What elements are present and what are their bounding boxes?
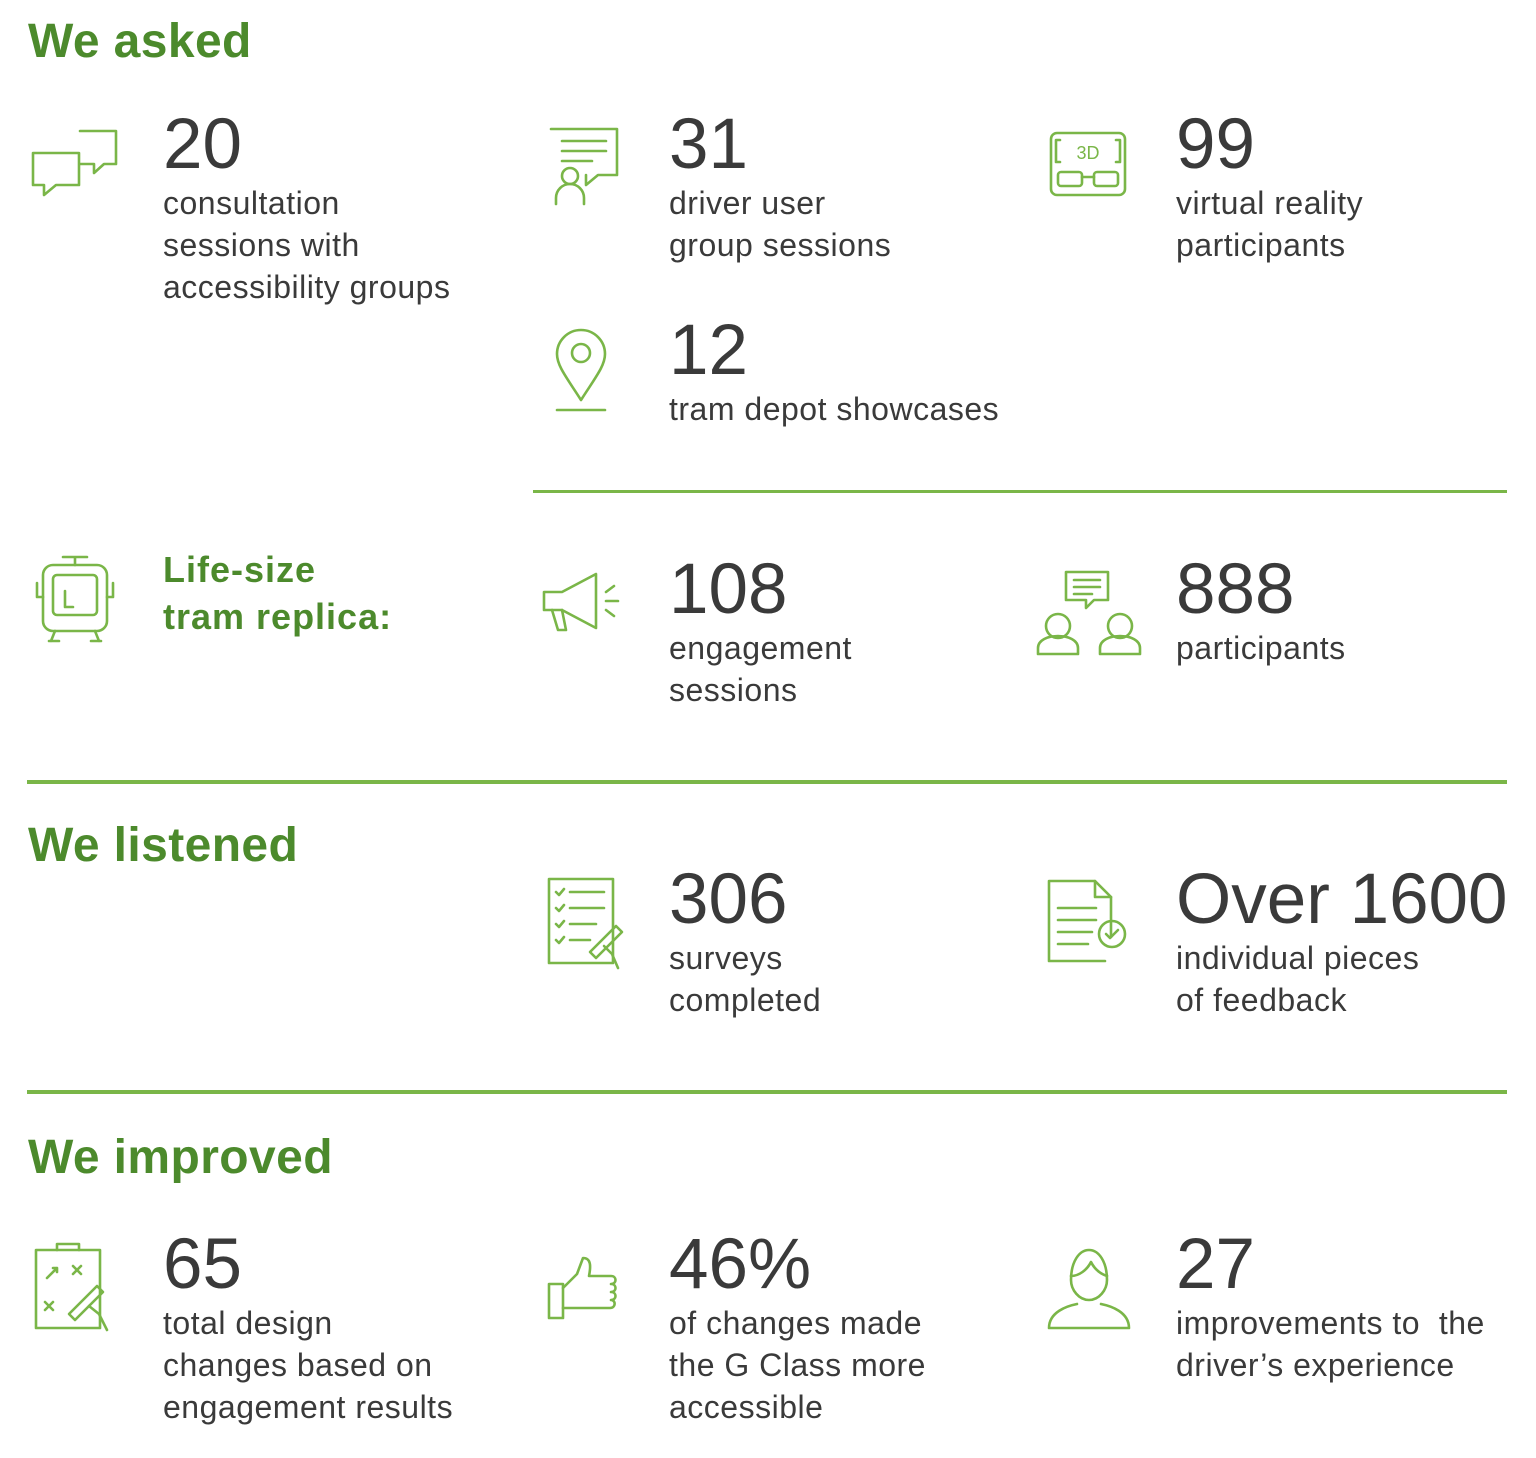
- stat: 46% more accessible: of changes made: [669, 1305, 922, 1341]
- heading: We improved: We improved: [28, 1131, 333, 1184]
- stat: 65 design changes: changes based on: [163, 1347, 433, 1383]
- heading: We asked: We asked: [28, 15, 252, 68]
- stat: 20 consultation sessions: [163, 105, 450, 305]
- icon: driver person: [1048, 1248, 1130, 1330]
- stat: 12 tram depot showcases: 12: [669, 311, 748, 390]
- text: Life-size tram replica: tram replica:: [163, 596, 392, 637]
- stat: 27 driver improvements: 27: [1176, 1225, 1255, 1304]
- stat: 20 consultation sessions: consultation: [163, 185, 340, 221]
- stat: Over 1600 feedback: [1176, 860, 1508, 1018]
- stat: 888 participants: [1176, 550, 1346, 666]
- stat: 27 driver improvements: [1176, 1225, 1485, 1383]
- stat: 108 engagement sessions: [669, 550, 852, 708]
- stat: 20 consultation sessions: accessibility groups: [163, 269, 450, 305]
- stat: 306 surveys completed: surveys: [669, 940, 783, 976]
- icon: 3D glasses: 3D: [1076, 143, 1100, 163]
- icon: checklist survey: [548, 878, 624, 970]
- icon: tram: [36, 556, 114, 642]
- stat: 306 surveys completed: completed: [669, 982, 821, 1018]
- icon: presenter: [550, 128, 618, 206]
- stat: 306 surveys completed: 306: [669, 860, 787, 939]
- icon: megaphone: [542, 572, 620, 632]
- text: Life-size tram replica: [163, 549, 392, 637]
- stat: 20 consultation sessions: 20: [163, 105, 242, 184]
- stat: Over 1600 feedback: of feedback: [1176, 982, 1347, 1018]
- stat: 306 surveys completed: [669, 860, 821, 1018]
- stat: 888 participants: 888: [1176, 550, 1294, 629]
- stat: 12 tram depot showcases: tram depot showcases: [669, 391, 999, 427]
- stat: 99 virtual reality participants: participants: [1176, 227, 1346, 263]
- stat: 46% more accessible: 46%: [669, 1225, 811, 1304]
- icon: two people with speech: [1036, 570, 1142, 656]
- stat: 27 driver improvements: driver’s experience: [1176, 1347, 1455, 1383]
- stat: Over 1600 feedback: individual pieces: [1176, 940, 1419, 976]
- stat: 888 participants: participants: [1176, 630, 1346, 666]
- icon: 3D glasses: [1050, 132, 1126, 196]
- text: Life-size tram replica: Life-size: [163, 549, 316, 590]
- stat: 108 engagement sessions: engagement: [669, 630, 852, 666]
- stat: 12 tram depot showcases: [669, 311, 999, 427]
- stat: 31 driver user group sessions: [669, 105, 891, 263]
- stat: Over 1600 feedback: Over 1600: [1176, 860, 1508, 939]
- stat: 99 virtual reality participants: virtual reality: [1176, 185, 1363, 221]
- stat: 46% more accessible: accessible: [669, 1389, 823, 1425]
- stat: 108 engagement sessions: 108: [669, 550, 787, 629]
- stat: 31 driver user group sessions: group sessions: [669, 227, 891, 263]
- stat: 108 engagement sessions: sessions: [669, 672, 798, 708]
- icon: location pin: [556, 328, 606, 412]
- icon: thumbs up: [548, 1256, 617, 1320]
- stat: 20 consultation sessions: sessions with: [163, 227, 360, 263]
- heading: We listened: We listened: [28, 819, 298, 872]
- icon: clipboard plan: [34, 1242, 108, 1332]
- stat: 46% more accessible: [669, 1225, 926, 1425]
- stat: 31 driver user group sessions: driver user: [669, 185, 826, 221]
- stat: 99 virtual reality participants: 99: [1176, 105, 1255, 184]
- stat: 65 design changes: [163, 1225, 453, 1425]
- stat: 65 design changes: total design: [163, 1305, 333, 1341]
- stat: 46% more accessible: the G Class more: [669, 1347, 926, 1383]
- icon: speech bubbles: [32, 130, 118, 196]
- stat: 99 virtual reality participants: [1176, 105, 1363, 263]
- stat: 65 design changes: 65: [163, 1225, 242, 1304]
- stat: 65 design changes: engagement results: [163, 1389, 453, 1425]
- stat: 27 driver improvements: improvements to the: [1176, 1305, 1485, 1341]
- stat: 31 driver user group sessions: 31: [669, 105, 748, 184]
- icon: document with check: [1048, 880, 1126, 962]
